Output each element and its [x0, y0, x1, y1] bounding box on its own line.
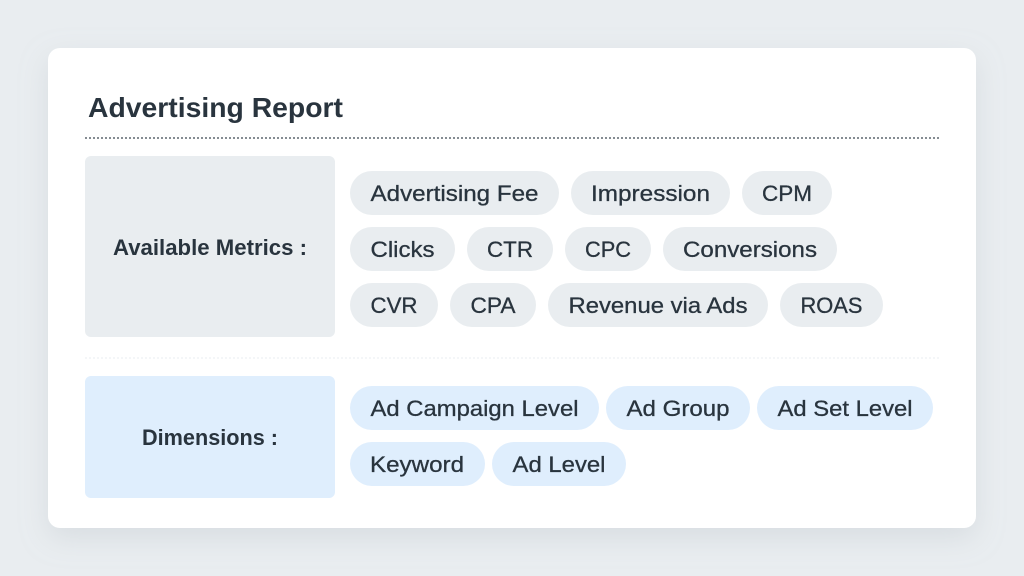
panel: dimensions — [85, 376, 933, 498]
metric pill: Advertising Fee: Advertising Fee — [370, 181, 538, 206]
metric pill: CPM: CPM — [762, 181, 812, 206]
metric pill: CTR — [467, 227, 553, 271]
metric pill: CPC — [565, 227, 651, 271]
dimension pill: Ad Campaign Level — [350, 386, 599, 430]
dimension pill: Ad Group: Ad Group — [626, 396, 730, 421]
metric pill: Revenue via Ads — [548, 283, 768, 327]
metric pill: CTR: CTR — [487, 237, 533, 262]
metric pill: ROAS: ROAS — [800, 293, 862, 318]
title: Advertising Report — [88, 92, 343, 123]
metric pill: CPA — [450, 283, 536, 327]
dimension pill: Ad Set Level: Ad Set Level — [778, 396, 912, 421]
metrics label box — [85, 156, 335, 337]
metric pill: CPM — [742, 171, 832, 215]
metric pill: CPA: CPA — [470, 293, 516, 318]
dimension pill: Keyword: Keyword — [370, 452, 464, 477]
metric pill: CVR: CVR — [370, 293, 418, 318]
dimensions label box: Dimensions : — [142, 425, 278, 450]
metric pill: Impression — [571, 171, 730, 215]
metric pill: CVR — [350, 283, 438, 327]
dimension pill: Keyword — [350, 442, 485, 486]
metrics label box: Available Metrics : — [113, 235, 307, 260]
metric pill: Advertising Fee — [350, 171, 559, 215]
metric pill: ROAS — [780, 283, 883, 327]
metric pill: Clicks — [350, 227, 455, 271]
metric pill: Clicks: Clicks — [370, 237, 434, 262]
metric pill: Impression: Impression — [591, 181, 710, 206]
panel: available metrics — [85, 156, 883, 337]
panel: report card — [48, 48, 976, 528]
dimension pill: Ad Level: Ad Level — [512, 452, 606, 477]
metric pill: CPC: CPC — [585, 237, 631, 262]
dimension pill: Ad Set Level — [757, 386, 933, 430]
dimension pill: Ad Group — [606, 386, 750, 430]
metric pill: Conversions: Conversions — [683, 237, 817, 262]
metric pill: Revenue via Ads: Revenue via Ads — [568, 293, 748, 318]
dimension pill: Ad Campaign Level: Ad Campaign Level — [370, 396, 578, 421]
metric pill: Conversions — [663, 227, 837, 271]
dimension pill: Ad Level — [492, 442, 626, 486]
dimensions label box — [85, 376, 335, 498]
